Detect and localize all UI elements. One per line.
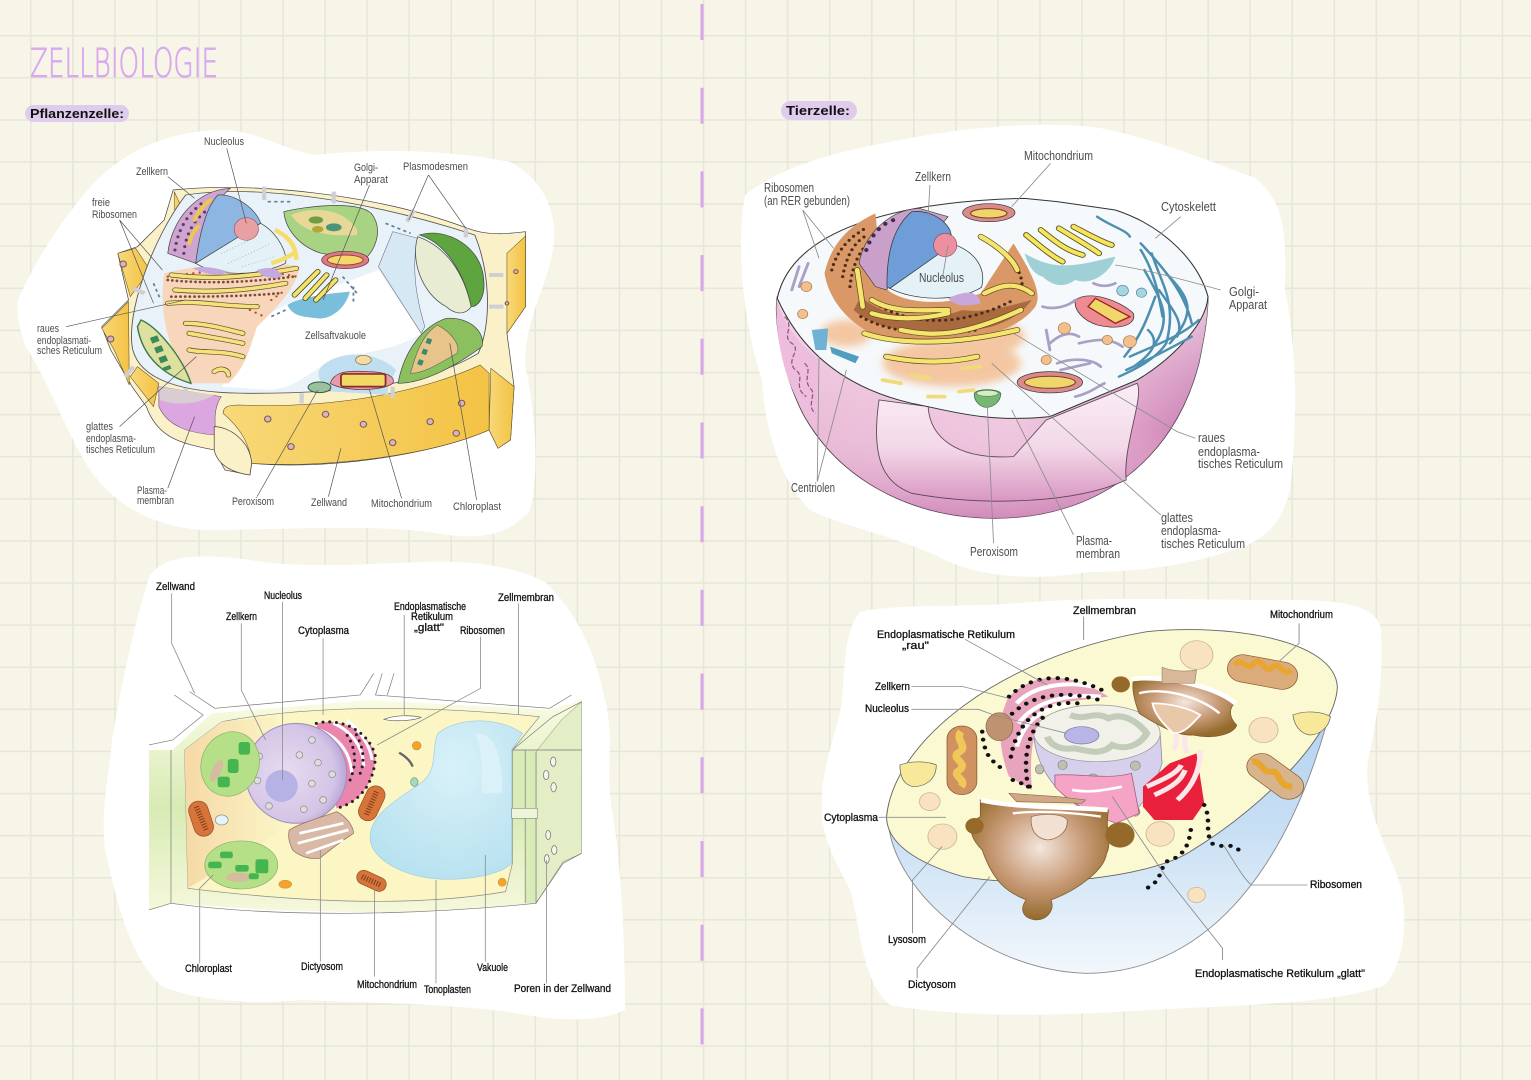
golgi apparatus bbox=[287, 272, 350, 318]
animal photo labels: endoplasma- bbox=[1161, 524, 1221, 538]
plasmodesmata bbox=[125, 187, 503, 403]
plant photo labels: tisches Reticulum bbox=[86, 444, 155, 456]
orange shading bbox=[184, 717, 289, 888]
white cut-out backing animal drawing bbox=[822, 599, 1404, 1015]
plant photo labels: raues bbox=[37, 323, 59, 335]
heading: Pflanzenzelle bbox=[25, 105, 129, 122]
small oval bbox=[411, 778, 418, 786]
plant photo labels: Nucleolus bbox=[204, 136, 244, 148]
cream cytoplasm top bbox=[887, 630, 1337, 882]
animal photo labels: Nucleolus bbox=[919, 271, 964, 285]
plant photo labels: glattes bbox=[86, 421, 113, 433]
plant photo labels: endoplasmati- bbox=[37, 335, 91, 347]
pink cell body bowl bbox=[776, 297, 1208, 518]
plant drawing labels: „glatt" bbox=[414, 622, 444, 634]
soft orange cytoplasm bbox=[821, 320, 1024, 387]
animal drawing labels: Zellmembran bbox=[1073, 605, 1136, 617]
animal photo labels: Apparat bbox=[1229, 298, 1267, 312]
top mitochondrion bbox=[963, 204, 1015, 222]
plant photo labels: sches Reticulum bbox=[37, 345, 102, 357]
nucleus dots bbox=[866, 220, 894, 250]
animal photo labels: Peroxisom bbox=[970, 545, 1018, 559]
right mitochondrion bbox=[1075, 296, 1134, 327]
purple ER bbox=[948, 293, 981, 305]
lower yellow ER fragments bbox=[883, 367, 981, 397]
lower mitochondrion bbox=[1017, 372, 1083, 393]
plasmodesmata and wall pores bbox=[107, 261, 518, 450]
peroxisome bbox=[308, 382, 331, 393]
animal photo labels: Mitochondrium bbox=[1024, 149, 1093, 163]
leader lines bbox=[879, 617, 1308, 978]
dictyosome bbox=[289, 812, 354, 859]
animal photo labels: glattes bbox=[1161, 511, 1193, 525]
ER right arc bbox=[271, 230, 296, 263]
white ER stripe bbox=[1072, 787, 1122, 791]
nucleus cut face bbox=[196, 195, 261, 263]
lower dictyosome bbox=[965, 793, 1135, 920]
animal photo labels: tisches Reticulum bbox=[1198, 457, 1283, 471]
smooth ER pieces bbox=[384, 716, 421, 721]
rough ER bbox=[316, 720, 375, 808]
animal photo labels: Zellkern bbox=[915, 170, 951, 184]
animal photo labels: Cytoskelett bbox=[1161, 200, 1216, 214]
nucleolus bbox=[234, 218, 258, 240]
plant photo labels bbox=[37, 136, 501, 513]
blue cytoplasm lower body bbox=[888, 687, 1336, 973]
ER curved piece bbox=[399, 753, 413, 767]
cell interior bbox=[777, 198, 1208, 418]
plant photo labels: endoplasma- bbox=[86, 433, 136, 445]
animal photo labels: Centriolen bbox=[791, 481, 835, 495]
nuclear pores bbox=[254, 737, 336, 813]
animal cell drawing illustration bbox=[879, 617, 1337, 978]
pale tonoplast wedge bbox=[378, 232, 425, 333]
white cut-out backing plant photo bbox=[17, 130, 554, 536]
right wall face bbox=[536, 702, 582, 903]
ER background bbox=[163, 263, 300, 383]
panel: plant cell drawing bbox=[104, 556, 625, 1019]
animal photo labels: Ribosomen bbox=[764, 181, 814, 195]
peroxisomes bbox=[279, 741, 506, 888]
rough ER swirl bbox=[825, 213, 1038, 343]
panel: animal cell drawing bbox=[822, 599, 1404, 1015]
orange ER speckles bbox=[168, 270, 296, 317]
nucleus blue face bbox=[887, 211, 955, 288]
lysosomes bbox=[1117, 285, 1147, 297]
white cut-out backing animal photo bbox=[741, 125, 1295, 577]
left chloroplast bbox=[137, 320, 191, 383]
animal drawing labels: „rau" bbox=[902, 640, 929, 652]
rough ER bbox=[982, 678, 1109, 790]
vacuole left bbox=[900, 762, 936, 787]
mitochondria cristae bbox=[196, 792, 381, 885]
animal photo labels: Golgi- bbox=[1229, 285, 1259, 299]
plant photo labels: Ribosomen bbox=[92, 209, 137, 221]
plant photo labels: membran bbox=[137, 495, 174, 507]
plant drawing labels bbox=[156, 581, 611, 996]
nucleus bbox=[245, 723, 347, 823]
grey membrane patch bbox=[159, 387, 214, 404]
plant drawing labels: Endoplasmatische bbox=[394, 601, 466, 613]
ribosomes free bbox=[1147, 805, 1241, 888]
plant drawing labels: Retikulum bbox=[411, 611, 453, 623]
plant drawing labels: Ribosomen bbox=[460, 625, 505, 637]
lower blue cytoplasm bbox=[318, 355, 396, 395]
plant photo labels: Mitochondrium bbox=[371, 498, 432, 510]
plant photo labels: Plasma- bbox=[137, 485, 167, 497]
plant photo labels: Golgi- bbox=[354, 162, 378, 174]
plant cell illustration bbox=[66, 148, 526, 500]
plant photo labels: freie bbox=[92, 197, 110, 209]
ribosome dots bbox=[832, 227, 1022, 333]
wall pores bbox=[543, 757, 557, 863]
right green chloroplast bbox=[416, 233, 484, 313]
textured left membrane bbox=[777, 300, 819, 423]
plant cell drawing illustration bbox=[149, 593, 582, 983]
small ribosome marks bbox=[154, 202, 411, 317]
cytoplasm bbox=[184, 708, 539, 901]
vacuole right bbox=[1293, 712, 1330, 735]
vacuole bbox=[370, 721, 522, 879]
darker ER interior bbox=[854, 297, 1032, 333]
animal photo labels: endoplasma- bbox=[1198, 445, 1260, 459]
cell wall bbox=[102, 187, 526, 475]
mitochondrion left bbox=[947, 726, 977, 795]
leader lines bbox=[803, 163, 1221, 543]
plant photo labels: Zellsaftvakuole bbox=[305, 330, 366, 342]
mitochondrion right bbox=[1241, 748, 1310, 805]
vacuole highlight bbox=[475, 733, 502, 793]
center pink dashed divider bbox=[700, 4, 704, 1048]
chromatin bbox=[1047, 715, 1147, 752]
heading: Tierzelle: Tierzelle: bbox=[786, 104, 850, 118]
yellow nuclear pore bars bbox=[189, 200, 211, 243]
brown nucleus bump bbox=[986, 713, 1013, 741]
panel: plant cell photo diagram bbox=[17, 130, 554, 536]
wall face front column bbox=[512, 750, 536, 903]
plant photo labels: Plasmodesmen bbox=[403, 161, 468, 173]
golgi apparatus bbox=[1024, 227, 1115, 285]
plant drawing labels: Poren in der Zellwand bbox=[514, 983, 611, 995]
plant drawing labels: Cytoplasma bbox=[298, 625, 350, 637]
plant drawing labels: Mitochondrium bbox=[357, 979, 417, 991]
heading: Pflanzenzelle: Pflanzenzelle: bbox=[30, 107, 124, 121]
animal cell illustration bbox=[776, 163, 1221, 543]
vesicles bbox=[798, 282, 1136, 365]
nuclear pores bbox=[1035, 760, 1140, 816]
top chloroplast bbox=[284, 205, 378, 260]
animal drawing labels: Nucleolus bbox=[865, 703, 909, 715]
bottom chloroplast bbox=[205, 841, 278, 889]
plant photo labels: Peroxisom bbox=[232, 496, 274, 508]
plant photo labels: Chloroplast bbox=[453, 501, 501, 513]
lower right chloroplast bbox=[398, 318, 482, 383]
leader lines bbox=[172, 593, 546, 983]
animal photo labels: Plasma- bbox=[1076, 534, 1112, 548]
plant drawing labels: Vakuole bbox=[477, 962, 508, 974]
plant drawing labels: Tonoplasten bbox=[424, 984, 471, 996]
vacuole bbox=[221, 270, 421, 390]
plant drawing labels: Zellkern bbox=[226, 611, 257, 623]
yellow ER bands bbox=[168, 268, 296, 375]
plant drawing labels: Chloroplast bbox=[185, 963, 232, 975]
pink smooth ER bbox=[1055, 773, 1139, 823]
mitochondrion top bbox=[322, 251, 369, 269]
yellow wall faces bbox=[102, 192, 526, 464]
nuclear envelope dots bbox=[175, 203, 205, 253]
animal drawing labels bbox=[824, 605, 1365, 991]
red golgi bbox=[1143, 725, 1204, 820]
lavender ER bbox=[193, 267, 282, 278]
nucleus outer dome bbox=[859, 208, 948, 290]
animal photo labels: (an RER gebunden) bbox=[764, 194, 850, 208]
lower mitochondrion bbox=[330, 371, 393, 390]
animal photo labels: raues bbox=[1198, 431, 1225, 445]
panel: animal cell photo diagram bbox=[741, 125, 1295, 577]
speckles on pale face bbox=[221, 240, 275, 267]
plant drawing labels: Zellmembran bbox=[498, 592, 554, 604]
plant photo labels: Apparat bbox=[354, 174, 388, 186]
plant drawing labels: Zellwand bbox=[156, 581, 195, 593]
plasma membrane purple wedge bbox=[159, 387, 221, 435]
wall curl bbox=[214, 427, 252, 475]
cytoplasm bbox=[131, 192, 487, 393]
lysosome circles bbox=[919, 641, 1278, 903]
animal drawing labels: Dictyosom bbox=[908, 979, 956, 991]
animal drawing labels: Mitochondrium bbox=[1270, 609, 1333, 621]
heading: Tierzelle bbox=[781, 101, 857, 120]
yellow ER bands bbox=[857, 237, 1032, 362]
mitochondria bbox=[186, 783, 389, 894]
nucleus lower face bbox=[196, 223, 286, 273]
wall left block bbox=[149, 700, 582, 913]
leader lines bbox=[66, 148, 477, 500]
nucleolus bbox=[934, 233, 957, 257]
top chloroplast bbox=[192, 724, 268, 804]
centrioles bbox=[812, 328, 859, 363]
animal photo labels: tisches Reticulum bbox=[1161, 537, 1245, 551]
title: ZELLBIOLOGIE bbox=[30, 41, 218, 87]
squiggles on membrane bbox=[785, 317, 815, 413]
animal drawing labels: Endoplasmatische Retikulum bbox=[877, 629, 1015, 641]
nucleus dome bbox=[168, 188, 230, 263]
animal drawing labels: Lysosom bbox=[888, 934, 926, 946]
animal drawing labels: Ribosomen bbox=[1310, 879, 1362, 891]
nucleus pale face bbox=[890, 245, 983, 298]
plasmodesma slot bbox=[512, 808, 537, 818]
plant photo labels: Zellwand bbox=[311, 497, 347, 509]
wall outlines bbox=[149, 673, 582, 913]
animal photo labels bbox=[764, 149, 1283, 561]
plant drawing labels: Nucleolus bbox=[264, 590, 302, 602]
plant drawing labels: Dictyosom bbox=[301, 961, 343, 973]
nucleolus bbox=[265, 770, 298, 802]
animal drawing labels: Zellkern bbox=[875, 681, 910, 693]
animal drawing labels: Endoplasmatische Retikulum „glatt" bbox=[1195, 968, 1365, 980]
mitochondrion top right bbox=[1225, 652, 1300, 692]
animal drawing labels: Cytoplasma bbox=[824, 812, 879, 824]
smooth ER strands bbox=[792, 263, 1123, 397]
nucleus body bbox=[1034, 733, 1162, 820]
peroxisome bbox=[974, 390, 1001, 407]
front cut-out wall bbox=[876, 383, 1139, 501]
white cut-out backing plant drawing bbox=[104, 556, 625, 1019]
animal photo labels: membran bbox=[1076, 547, 1120, 561]
vesicle bbox=[356, 355, 371, 365]
small vesicle bbox=[215, 815, 228, 825]
upper dictyosome bbox=[1112, 667, 1237, 737]
cytoskeleton bbox=[1097, 217, 1199, 377]
plant photo labels: Zellkern bbox=[136, 166, 168, 178]
nucleolus bbox=[1064, 727, 1099, 744]
nucleus top bbox=[1034, 705, 1160, 762]
